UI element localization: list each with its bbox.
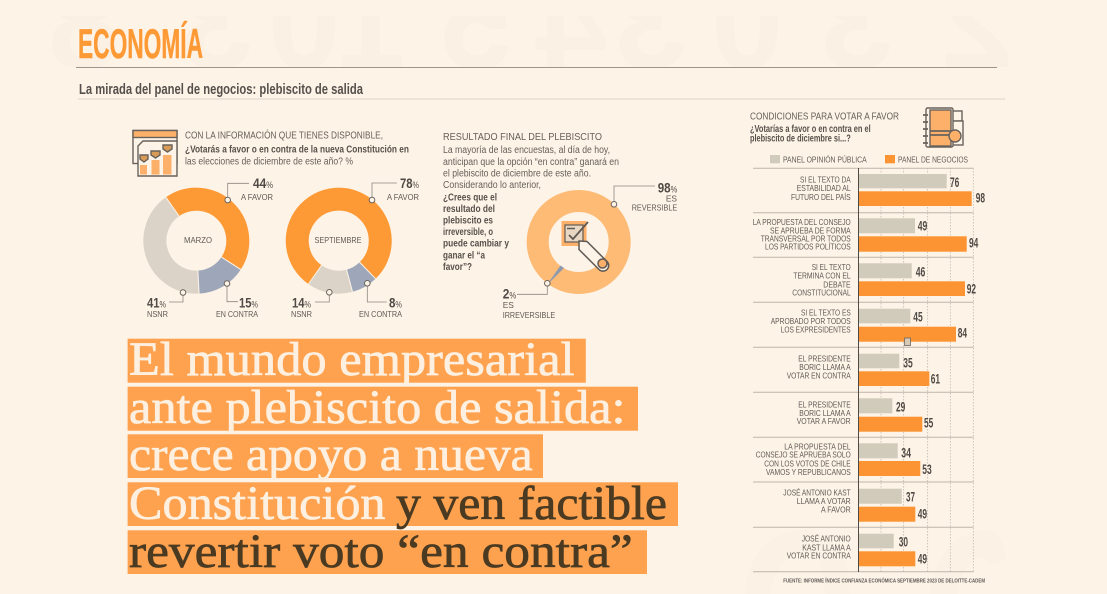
intro text: La mayoría de las encuestas, al día de hoy, (443, 145, 610, 156)
row: debate constitucional: SI EL TEXTO (812, 262, 851, 272)
donut chart: marzo: EN CONTRA (216, 309, 258, 319)
row: chile vamos y republicanos: VAMOS Y REPUBLICANOS (766, 467, 851, 477)
donut chart: septiembre: EN CONTRA (359, 309, 402, 319)
row: expresidentes: SI EL TEXTO ES (801, 308, 851, 318)
row: transversal: LOS PARTIDOS POLÍTICOS (765, 242, 851, 252)
row: kast a favor: 37 (906, 489, 915, 505)
donut chart: reversible: ES (666, 194, 677, 204)
donut chart: reversible: IRREVERSIBLE (503, 310, 556, 320)
row: boric en contra: 35 (903, 354, 913, 370)
row: chile vamos y republicanos: 34 (901, 444, 911, 460)
legend: PANEL OPINIÓN PÚBLICA (783, 155, 867, 165)
question text: plebiscito es (443, 216, 493, 226)
row: boric a favor: BORIC LLAMA A (799, 408, 851, 418)
row: kast en contra: JOSÉ ANTONIO (802, 534, 851, 544)
headline with highlighted lines: El mundo empresarial (129, 333, 574, 386)
panel heading: plebiscito de diciembre si...? (750, 133, 851, 144)
bar chart (753, 174, 985, 566)
headline with highlighted lines: ante plebiscito de salida: (129, 381, 626, 434)
donut chart: marzo: NSNR (147, 309, 168, 319)
row: estabilidad: 98 (976, 190, 985, 206)
question text: puede cambiar y (443, 239, 509, 250)
row: chile vamos y republicanos: 53 (922, 461, 932, 477)
legend (770, 155, 968, 165)
question text: resultado del (443, 204, 495, 215)
donut chart: marzo: 41% (147, 294, 166, 310)
row: debate constitucional (792, 262, 976, 297)
legend: PANEL DE NEGOCIOS (898, 155, 968, 165)
donut chart: septiembre: 8% (389, 294, 402, 310)
panel: conditions to vote in favor (750, 108, 985, 584)
donut chart: marzo: 15% (239, 294, 258, 310)
row: kast a favor: 49 (918, 505, 927, 521)
intro text: anticipan que la opción “en contra” ganará en (443, 157, 619, 168)
row: transversal: 94 (969, 235, 978, 251)
subtitle: La mirada del panel de negocios: plebiscito de salida (79, 81, 363, 98)
icon: checklist and pencil (562, 221, 609, 271)
row: estabilidad: 76 (950, 174, 959, 190)
donut chart: reversible: REVERSIBLE (632, 203, 678, 213)
row: expresidentes: 45 (913, 308, 923, 324)
row: kast en contra: 30 (899, 534, 908, 550)
row: boric en contra: BORIC LLAMA A (799, 362, 851, 372)
question text: irreversible, o (443, 227, 493, 238)
panel: voting intention (133, 128, 419, 319)
row: transversal: 49 (918, 217, 927, 233)
icon: chart document (133, 130, 177, 176)
row: kast en contra: KAST LLAMA A (802, 542, 851, 552)
source note: FUENTE: INFORME ÍNDICE CONFIANZA ECONÓMICA SEPTIEMBRE 2023 DE DELOITTE-CADEM (783, 576, 985, 584)
row: debate constitucional: TERMINA CON EL (793, 271, 851, 281)
row: estabilidad: FUTURO DEL PAÍS (791, 192, 851, 202)
panel heading: CONDICIONES PARA VOTAR A FAVOR (750, 111, 899, 122)
row: kast a favor (783, 488, 927, 522)
row: debate constitucional: DEBATE (823, 279, 851, 289)
question text: ganar el “a (443, 250, 485, 261)
panel heading (750, 111, 899, 144)
row: expresidentes: APROBADO POR TODOS (771, 316, 851, 326)
row: estabilidad: SI EL TEXTO DA (800, 174, 851, 184)
panel heading: ¿Votarías a favor o en contra en el (750, 124, 871, 135)
row: transversal: TRANSVERSAL POR TODOS (761, 233, 851, 243)
row: estabilidad (791, 174, 985, 206)
row: kast a favor: LLAMA A VOTAR (797, 496, 851, 506)
row: transversal (753, 217, 978, 252)
row: debate constitucional: 92 (967, 280, 976, 296)
donut chart: reversible (503, 180, 678, 320)
donut chart: reversible: 98% (658, 180, 677, 196)
question text: CON LA INFORMACIÓN QUE TIENES DISPONIBLE, (185, 128, 383, 142)
title: ECONOMÍA: ECONOMÍA (78, 20, 203, 67)
donut chart: septiembre: SEPTIEMBRE (314, 235, 362, 245)
row: chile vamos y republicanos (756, 441, 932, 477)
donut chart: septiembre (291, 175, 419, 319)
row: kast a favor: JOSÉ ANTONIO KAST (783, 488, 851, 498)
intro text: el plebiscito de diciembre de este año. (443, 168, 591, 180)
row: expresidentes (771, 308, 967, 346)
row: estabilidad: ESTABILIDAD AL (797, 183, 851, 193)
donut chart: marzo (147, 175, 273, 319)
row: boric en contra: 61 (931, 370, 940, 386)
question text (443, 193, 509, 273)
headline with highlighted lines (128, 333, 678, 578)
panel: final plebiscite result (443, 132, 678, 320)
intro text: Considerando lo anterior, (443, 180, 541, 191)
row: boric en contra: EL PRESIDENTE (798, 354, 851, 364)
row: boric a favor: VOTAR A FAVOR (797, 416, 851, 426)
row: boric en contra: VOTAR EN CONTRA (787, 370, 851, 380)
row: expresidentes: 84 (958, 324, 967, 340)
donut chart: reversible: 2% (503, 285, 516, 301)
row: transversal: LA PROPUESTA DEL CONSEJO (753, 217, 851, 227)
row: kast en contra: 49 (918, 550, 927, 566)
row: boric a favor (797, 398, 933, 432)
donut chart: septiembre: NSNR (291, 309, 312, 319)
row: boric a favor: EL PRESIDENTE (798, 400, 851, 410)
header: section title and subtitle (76, 20, 1005, 99)
icon: notebook with report (923, 108, 963, 147)
row: boric a favor: 29 (896, 399, 905, 415)
headline with highlighted lines: Constitución (129, 477, 386, 530)
row: chile vamos y republicanos: CON LOS VOTOS DE CHILE (764, 458, 851, 468)
row: debate constitucional: CONSTITUCIONAL (792, 287, 851, 297)
row: expresidentes: LOS EXPRESIDENTES (781, 324, 851, 334)
row: kast a favor: A FAVOR (821, 504, 851, 514)
row: boric en contra (787, 354, 940, 386)
question text: ¿Crees que el (443, 193, 497, 204)
question text: las elecciones de diciembre de este año? % (185, 156, 353, 168)
row: chile vamos y republicanos: LA PROPUESTA DEL (784, 441, 851, 451)
row: transversal: SE APRUEBA DE FORMA (770, 225, 851, 235)
donut chart: septiembre: 14% (292, 294, 311, 310)
headline with highlighted lines: revertir voto “en contra” (129, 525, 633, 578)
donut chart: reversible: ES (503, 300, 514, 310)
donut chart: marzo: 44% (253, 175, 273, 191)
question text (185, 128, 409, 168)
donut chart: septiembre: A FAVOR (387, 192, 419, 202)
row: kast en contra (787, 534, 927, 566)
intro text (443, 132, 619, 191)
row: kast en contra: VOTAR EN CONTRA (787, 550, 851, 560)
row: chile vamos y republicanos: CONSEJO SE APRUEBA SOLO (756, 450, 851, 460)
intro text: RESULTADO FINAL DEL PLEBISCITO (443, 132, 602, 143)
donut chart: marzo: A FAVOR (241, 192, 273, 202)
question text: favor”? (443, 262, 472, 273)
question text: ¿Votarás a favor o en contra de la nueva Constitución en (185, 144, 409, 156)
headline with highlighted lines: y ven factible (396, 477, 667, 530)
headline with highlighted lines: crece apoyo a nueva (129, 428, 533, 481)
row: boric a favor: 55 (924, 415, 933, 431)
donut chart: marzo: MARZO (184, 235, 212, 245)
row: debate constitucional: 46 (916, 264, 925, 280)
donut chart: septiembre: 78% (400, 175, 419, 191)
